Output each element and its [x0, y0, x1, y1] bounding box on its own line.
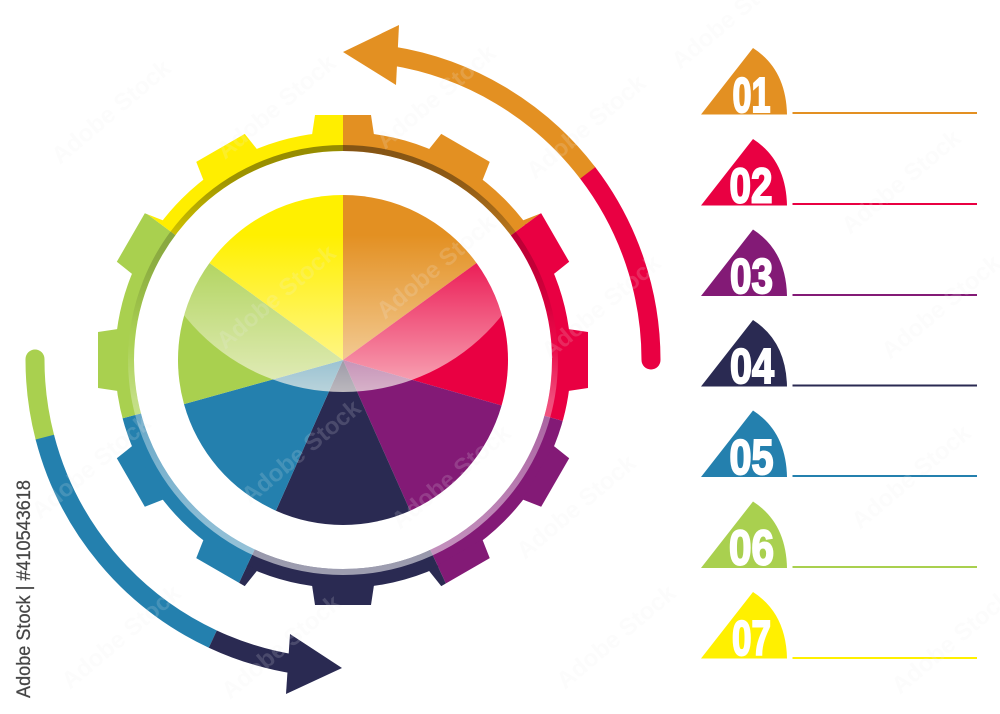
marker 05: [701, 410, 787, 477]
watermark: Adobe Stock: [237, 394, 367, 510]
legend item 01: [701, 48, 977, 123]
arrow: bottom left arc: [35, 359, 342, 694]
gear segment: orange: [343, 115, 541, 236]
legend item 04: [701, 320, 977, 394]
arc segment: orange: [391, 56, 588, 173]
number 01: 01: [732, 69, 770, 123]
watermark: Adobe Stock: [47, 54, 177, 170]
watermark: Adobe Stock: [387, 419, 517, 535]
gear inner bevel: [131, 148, 555, 572]
arc segment: navy: [213, 639, 295, 664]
gear segment: blue: [116, 414, 254, 583]
number 03: 03: [730, 250, 773, 304]
pie slice: orange: [343, 195, 476, 360]
pie slice: navy: [276, 360, 410, 525]
arc segment: blue: [45, 437, 213, 639]
watermark: Adobe Stock: [537, 249, 667, 365]
watermark: Adobe Stock: [837, 124, 967, 240]
arc segment: green: [35, 359, 45, 437]
legend item 05: [701, 410, 977, 485]
legend item 07: [701, 592, 977, 666]
gear segment: navy: [239, 549, 446, 605]
marker 06: [701, 502, 787, 568]
legend item 06: [701, 502, 977, 576]
gear segment: purple: [430, 416, 570, 584]
number 06: 06: [729, 522, 774, 576]
line 02: [792, 203, 977, 205]
marker 03: [701, 230, 787, 296]
marker 02: [701, 139, 787, 206]
marker 04: [701, 320, 787, 386]
watermark: Adobe Stock: [212, 49, 342, 165]
watermark: Adobe Stock: [847, 419, 977, 535]
arrow: top right arc: [343, 25, 651, 360]
stock id caption: Adobe Stock | #410543618: [14, 480, 35, 698]
line 03: [792, 294, 977, 296]
watermark: Adobe Stock: [27, 409, 157, 525]
marker 07: [701, 592, 787, 658]
pie slice: purple: [343, 360, 502, 511]
pie slice: blue: [184, 360, 343, 511]
watermark: Adobe Stock: [372, 209, 502, 325]
number 05: 05: [730, 431, 774, 485]
pie slice: red: [343, 263, 508, 406]
watermark: Adobe Stock: [372, 39, 502, 155]
number 02: 02: [730, 160, 772, 214]
marker 01: [701, 48, 787, 114]
gear segment: red: [510, 213, 588, 421]
watermark: Adobe Stock: [512, 449, 642, 565]
arrowhead: navy: [286, 634, 342, 694]
arrowhead: orange: [343, 25, 399, 85]
legend item 02: [701, 139, 977, 214]
watermark: Adobe Stock: [522, 69, 652, 185]
number 07: 07: [732, 612, 771, 666]
line 07: [792, 657, 977, 659]
gear ring: [98, 115, 588, 605]
pie chart: [178, 195, 508, 525]
watermark: Adobe Stock: [212, 239, 342, 355]
legend item 03: [701, 230, 977, 304]
gear segment: yellow: [147, 115, 343, 235]
watermark: Adobe Stock: [57, 579, 187, 695]
watermark: Adobe Stock: [217, 589, 347, 705]
line 01: [792, 112, 977, 114]
watermark: Adobe Stock: [552, 579, 682, 695]
line 06: [792, 566, 977, 568]
pie slice: green: [178, 263, 343, 404]
pie gloss highlight: [184, 243, 502, 392]
number 04: 04: [730, 340, 774, 394]
line 05: [792, 475, 977, 477]
line 04: [792, 384, 977, 386]
pie slice: yellow: [210, 195, 343, 360]
gear segment: green: [98, 213, 176, 418]
arc segment: red: [588, 173, 651, 360]
